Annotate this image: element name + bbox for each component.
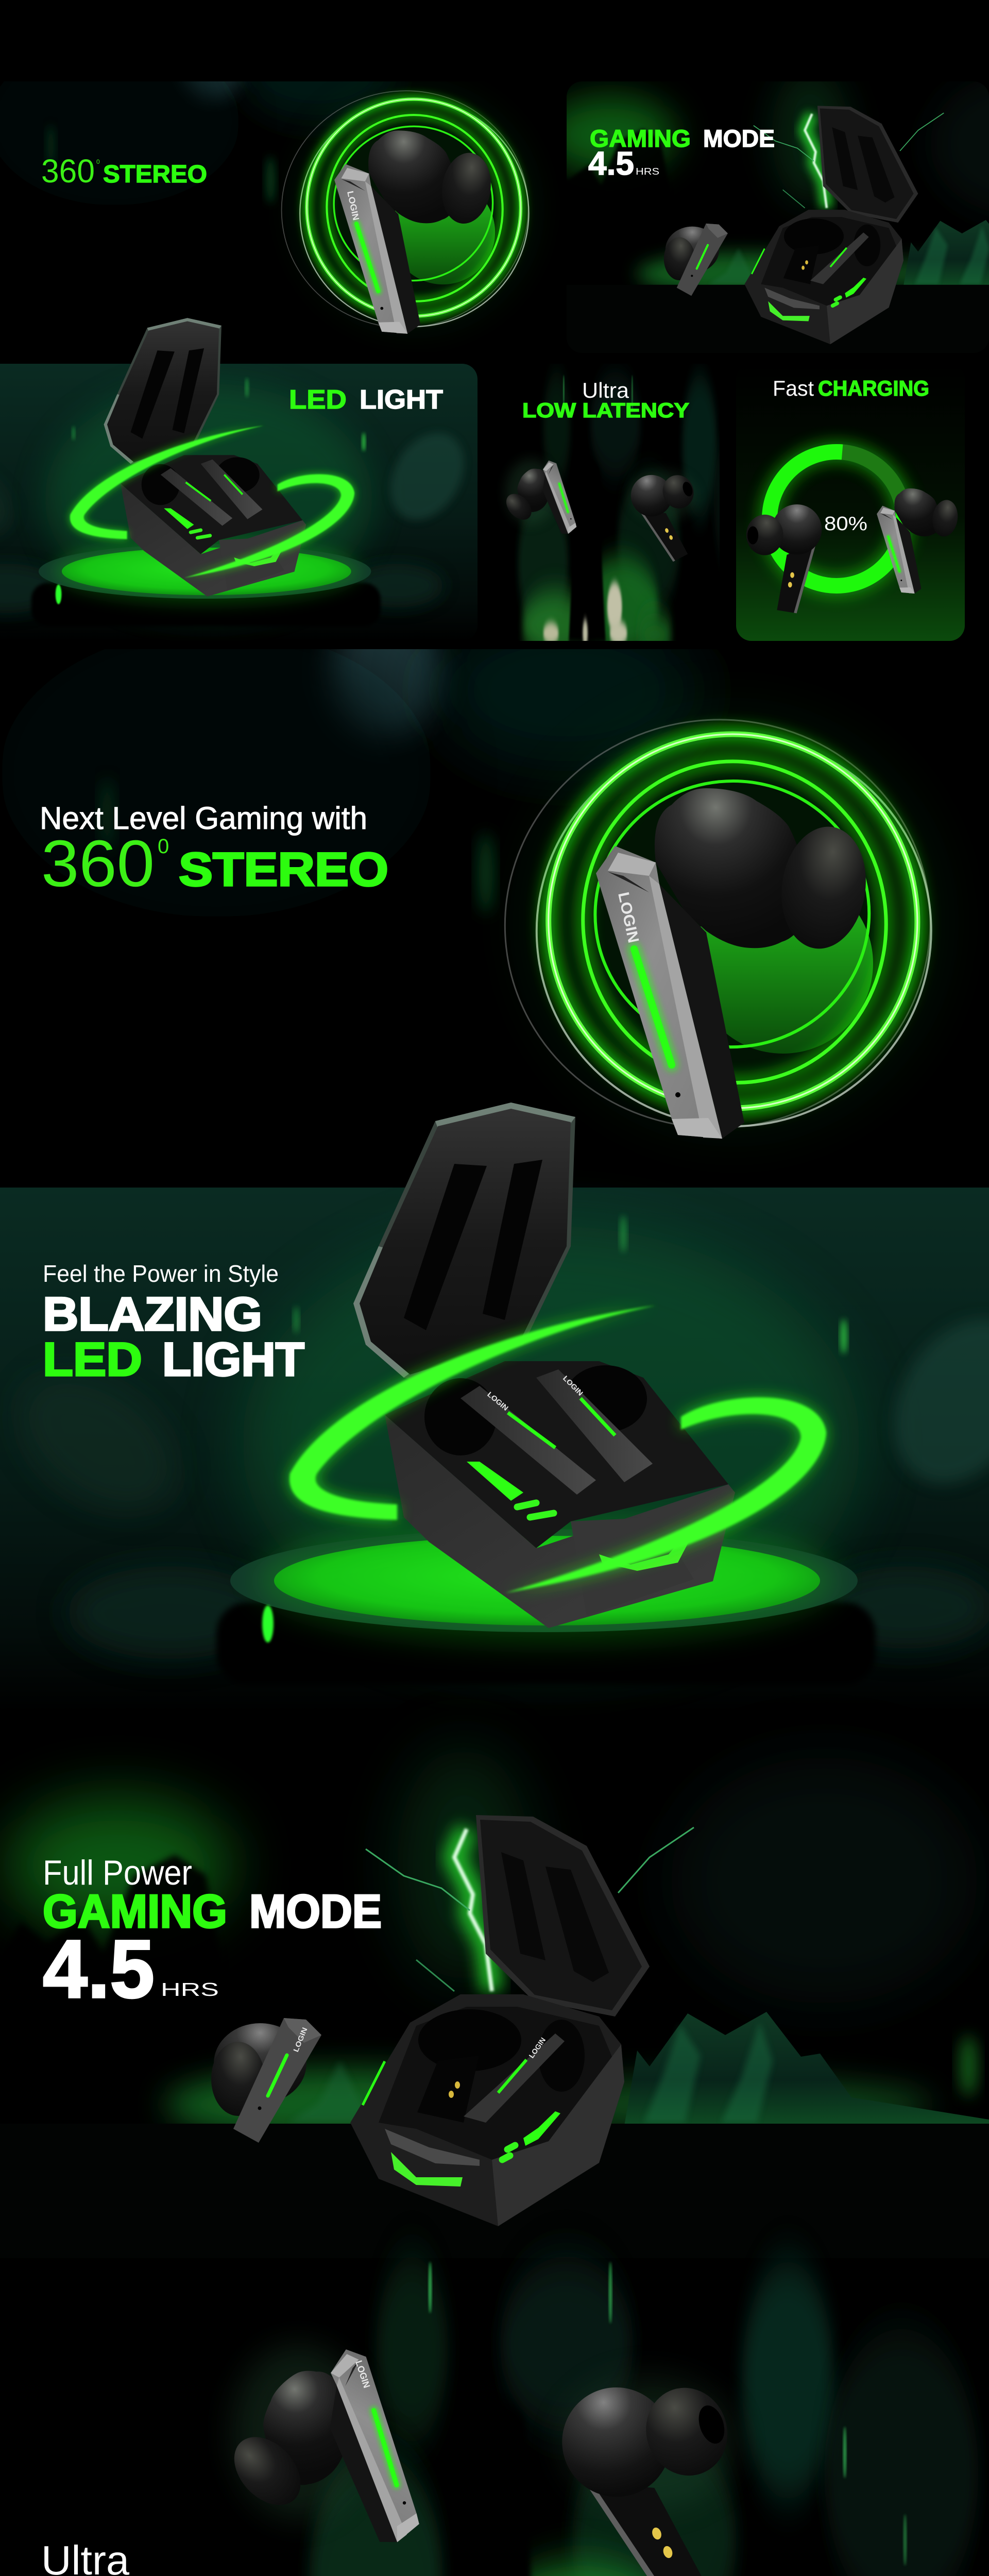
heading: full power gaming mode 4.5 hrs <box>43 1853 382 2015</box>
heading: 360 stereo <box>41 152 207 190</box>
heading: next level gaming with 360 stereo <box>40 801 388 901</box>
panel: LED light thumbnail <box>0 318 478 631</box>
charge value: 80% <box>824 513 867 535</box>
heading: LED light <box>289 385 443 415</box>
heading: full power gaming mode 4.5 hrs: GAMING <box>43 1886 227 1938</box>
earbud in sound rings <box>0 603 989 1188</box>
heading: full power gaming mode 4.5 hrs: HRS <box>161 1979 219 2000</box>
charging case with LED ring: LOGIN <box>486 1390 510 1412</box>
heading: next level gaming with 360 stereo: 360 <box>41 827 155 901</box>
heading: next level gaming with 360 stereo: STEREO <box>179 843 388 896</box>
panel: fast charging thumbnail <box>736 364 965 641</box>
heading: feel the power, blazing LED light: BLAZING <box>43 1288 262 1341</box>
heading: full power gaming mode 4.5 hrs: 4.5 <box>43 1923 155 2015</box>
heading: 360 stereo: 0 <box>96 158 100 165</box>
heading: gaming mode 4.5 hrs: HRS <box>636 166 659 177</box>
heading: LED light: LED <box>289 385 347 415</box>
heading: ultra low latency <box>522 378 689 422</box>
charging case with LED ring <box>289 1103 826 1628</box>
heading: next level gaming with 360 stereo: Next Level Gaming with <box>40 801 367 836</box>
heading: feel the power, blazing LED light: Feel the Power in Style <box>43 1260 279 1287</box>
heading: fast charging <box>773 376 929 400</box>
side earbud: LOGIN <box>292 2026 309 2053</box>
earbuds over flames: LOGIN <box>353 2359 372 2389</box>
panel: 360 stereo thumbnail <box>42 81 535 334</box>
heading: 360 stereo: 360 <box>41 152 95 190</box>
earbuds over flames <box>205 2343 778 2576</box>
panel: gaming mode thumbnail <box>567 81 989 344</box>
heading: 360 stereo: STEREO <box>103 161 207 188</box>
charge ring 80 percent <box>756 438 917 599</box>
panel: low latency thumbnail <box>491 364 772 659</box>
heading: fast charging: CHARGING <box>818 376 929 400</box>
heading: gaming mode 4.5 hrs: GAMING <box>590 125 691 152</box>
heading: next level gaming with 360 stereo: 0 <box>158 835 169 858</box>
heading: gaming mode 4.5 hrs: 4.5 <box>588 145 634 182</box>
heading: LED light: LIGHT <box>360 385 443 415</box>
panel: next level gaming 360 stereo <box>0 603 989 1188</box>
heading: ultra low latency: Ultra <box>582 378 629 402</box>
heading: feel the power, blazing LED light: LED <box>43 1333 142 1386</box>
panel: ultra low latency <box>0 2257 989 2576</box>
charging case with LED ring: LOGIN <box>561 1374 585 1397</box>
earbud in sound rings: LOGIN <box>615 891 642 944</box>
heading: gaming mode 4.5 hrs: MODE <box>703 125 775 152</box>
heading: gaming mode 4.5 hrs <box>588 125 775 182</box>
side earbud <box>211 2018 321 2143</box>
heading: ultra low latency: LOW LATENCY <box>522 399 689 422</box>
heading: fast charging: Fast <box>773 376 814 400</box>
heading: feel the power, blazing LED light <box>43 1260 304 1386</box>
heading: full power gaming mode 4.5 hrs: MODE <box>249 1886 382 1938</box>
panel: blazing LED light <box>0 1103 989 1713</box>
earbuds <box>746 488 960 613</box>
panel: full power gaming mode <box>0 1716 989 2258</box>
heading: feel the power, blazing LED light: LIGHT <box>162 1333 304 1386</box>
charging case with LED ring <box>70 318 354 597</box>
heading: full power gaming mode 4.5 hrs: Full Power <box>43 1853 192 1892</box>
case brand mark: LOGIN <box>527 2036 547 2060</box>
earbud brand mark: LOGIN <box>345 190 361 222</box>
